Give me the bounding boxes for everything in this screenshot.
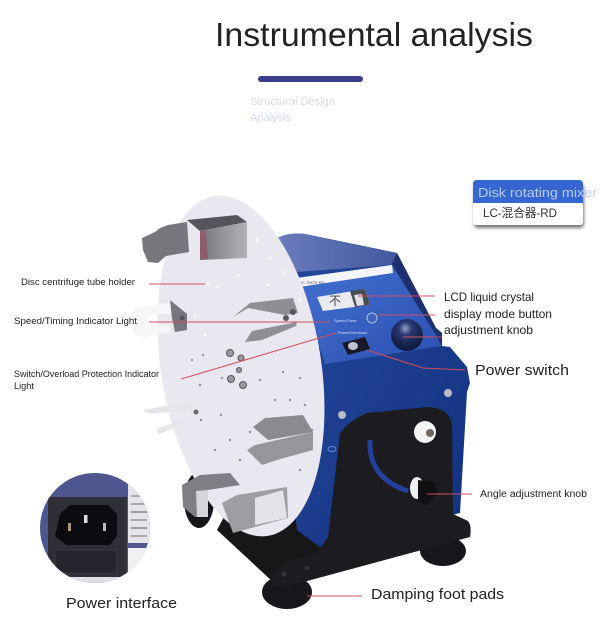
- tube clip: bottom front: [182, 473, 288, 533]
- socket panel: [48, 497, 127, 577]
- LCD screen: 不: [329, 294, 341, 308]
- fuse drawer: [55, 550, 117, 573]
- label: overload indicator: Light: [14, 381, 34, 391]
- white label strip: [296, 265, 393, 287]
- callout lines: [149, 284, 472, 596]
- title: Instrumental analysis: [215, 16, 533, 53]
- top white bolt: [414, 421, 436, 443]
- label: overload indicator: [14, 369, 159, 391]
- disc holes: [194, 238, 301, 336]
- model badge: Disk rotating mixer: [478, 185, 598, 200]
- IEC socket: [55, 505, 117, 545]
- tube clip: right lower: [247, 415, 313, 465]
- housing top: [277, 234, 397, 272]
- device: mixer: [132, 184, 471, 609]
- label: disc holder: Disc centrifuge tube holder: [21, 277, 135, 287]
- tube clip: right upper: [233, 298, 298, 342]
- adjustment knob: [391, 319, 423, 351]
- label: foot pads: Damping foot pads: [371, 586, 504, 603]
- tube clip: left upper: [132, 300, 187, 338]
- right foot: [420, 536, 466, 566]
- label: speed indicator: Speed/Timing Indicator Light: [14, 316, 137, 327]
- screw heads: [444, 389, 452, 397]
- control panel: Power/Overload: [338, 330, 367, 335]
- label: LCD and knob: [444, 290, 552, 337]
- front foot: [262, 575, 312, 609]
- power interface inset: [40, 473, 158, 585]
- dark control rim: [392, 253, 442, 346]
- label: LCD and knob: adjustment knob: [444, 323, 533, 337]
- model badge: LC-混合器-RD: [483, 205, 557, 220]
- label: power interface: Power interface: [66, 596, 177, 612]
- tube clip: left lower: [143, 400, 200, 435]
- label: power switch: Power switch: [475, 362, 569, 379]
- label: angle knob: Angle adjustment knob: [480, 489, 587, 500]
- black base plate: [217, 500, 340, 582]
- angle slot: [370, 440, 408, 491]
- blue housing: [277, 234, 470, 547]
- centre bolts: [226, 350, 246, 388]
- subtitle: Structural Design: [250, 96, 335, 108]
- tube clip: top: [142, 215, 247, 263]
- LCD screen: [317, 289, 370, 311]
- control panel: [296, 265, 442, 364]
- model badge: [473, 180, 598, 228]
- base holes: [282, 572, 286, 576]
- rating label: [128, 484, 150, 572]
- label: LCD and knob: LCD liquid crystal: [444, 290, 534, 304]
- mount ring: [328, 446, 336, 452]
- mode button: [367, 313, 377, 323]
- rotating disc: [135, 184, 347, 548]
- label: LCD and knob: display mode button: [444, 307, 552, 321]
- label: overload indicator: Switch/Overload Protection Indicator: [14, 369, 159, 379]
- angle adjustment knob: [410, 477, 438, 506]
- black side plate: [272, 407, 471, 587]
- rear foot: [184, 472, 214, 528]
- indicator labels: Speed/Timer: [334, 318, 357, 323]
- control panel: INC. RATE RD: [298, 280, 324, 285]
- title accent bar: [258, 76, 363, 82]
- subtitle: [250, 96, 335, 124]
- subtitle: Analysis: [250, 112, 291, 124]
- power switch: [342, 337, 370, 355]
- disc dark holes: [191, 354, 313, 491]
